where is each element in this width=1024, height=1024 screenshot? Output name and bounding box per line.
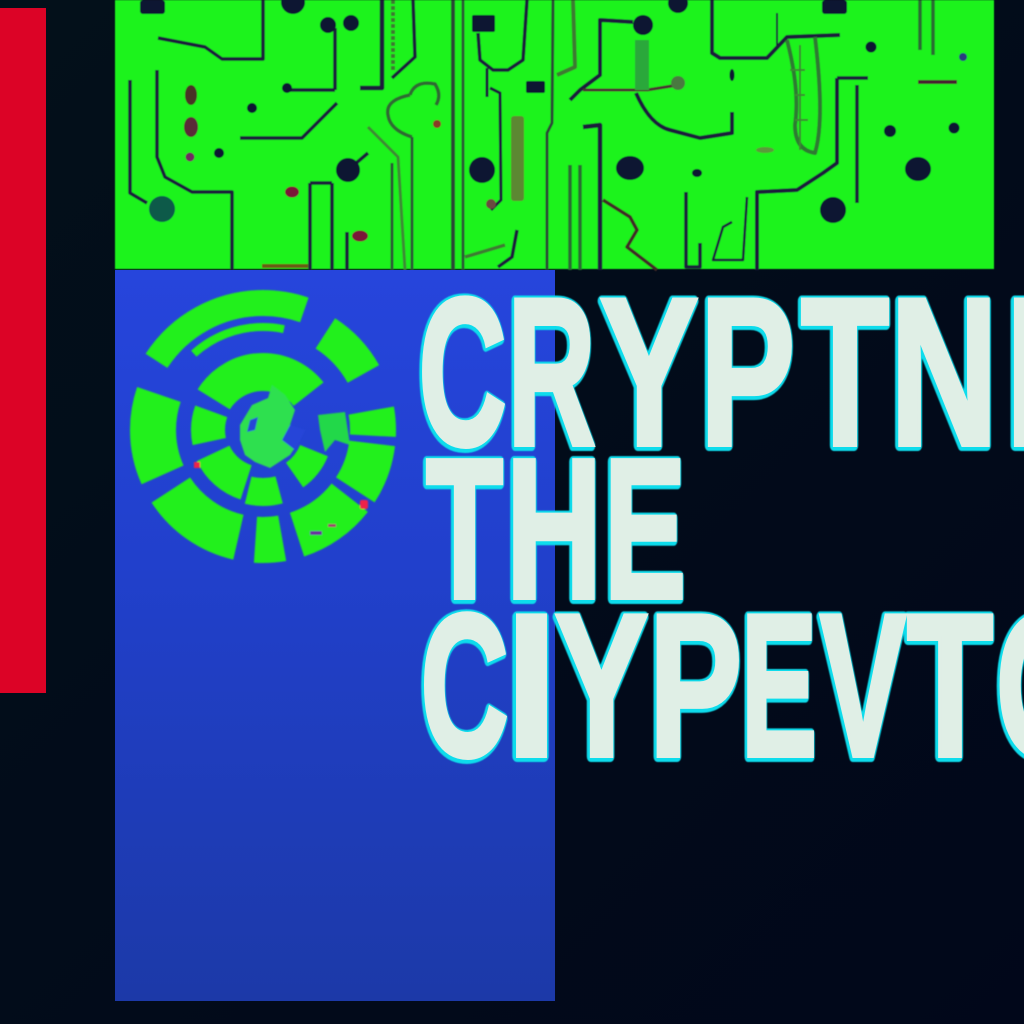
wheel right patchy segment — [318, 412, 350, 452]
title white fill: V — [820, 572, 906, 800]
title cyan edge — [425, 420, 685, 642]
title cyan edge: E — [740, 574, 816, 800]
title cyan edge: H — [505, 420, 601, 642]
title cyan edge: P — [699, 256, 794, 490]
title cyan edge — [420, 574, 1024, 800]
title white fill: R — [508, 254, 596, 490]
title white fill: E — [604, 418, 686, 640]
title cyan edge: V — [819, 574, 905, 800]
title white fill — [420, 572, 1024, 800]
title white fill: C — [418, 254, 506, 490]
title cyan edge: T — [800, 256, 888, 490]
wheel red marks — [194, 462, 368, 535]
wheel ring segments — [136, 303, 390, 557]
title: THE — [425, 418, 686, 642]
wheel hub holes — [247, 417, 305, 450]
title white fill: P — [700, 254, 795, 490]
title white fill: P — [649, 572, 742, 800]
title cyan edge: Y — [554, 574, 647, 800]
panel: green circuit board — [115, 0, 994, 270]
title white fill: Y — [600, 254, 698, 490]
title cyan edge: T — [425, 420, 502, 642]
title cyan edge: Y — [599, 256, 697, 490]
title: CIYPEVTO — [420, 572, 1024, 800]
title white fill — [418, 254, 1024, 490]
title cyan edge: C — [418, 256, 506, 490]
title cyan edge: P — [648, 574, 741, 800]
title white fill: Y — [555, 572, 648, 800]
title white fill: T — [801, 254, 889, 490]
circuit accents — [149, 40, 967, 268]
title white fill: T — [426, 418, 503, 640]
panel: red vertical bar — [0, 8, 46, 693]
title cyan edge: R — [506, 256, 594, 490]
wheel center hub — [240, 385, 300, 468]
title white fill: I — [506, 572, 557, 800]
title cyan edge: E — [603, 420, 685, 642]
icon: circular green cipher wheel — [136, 303, 390, 557]
panel: blue block — [115, 270, 555, 1001]
circuit pads — [140, 0, 960, 223]
title: CRYPTN — [418, 254, 1024, 490]
title white fill: C — [420, 572, 508, 800]
title white fill: E — [741, 572, 817, 800]
title white fill: H — [506, 418, 602, 640]
title white fill — [426, 418, 686, 640]
circuit traces — [130, 0, 957, 270]
title cyan edge: I — [505, 574, 556, 800]
title cyan edge — [418, 256, 1024, 490]
title cyan edge: C — [420, 574, 508, 800]
